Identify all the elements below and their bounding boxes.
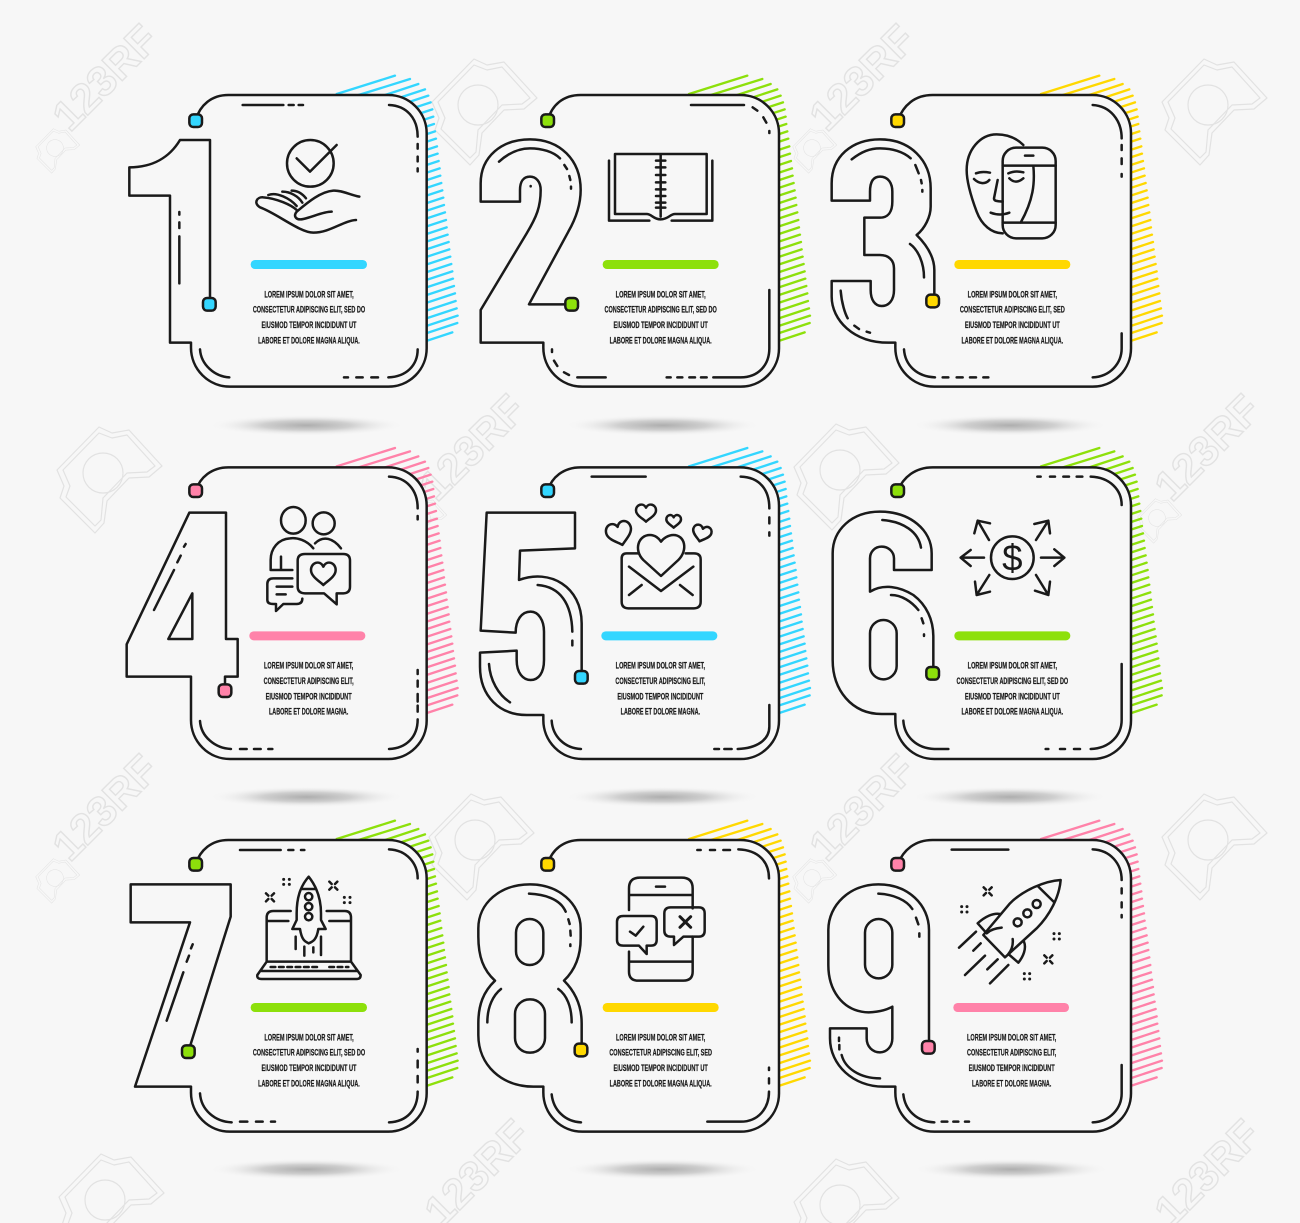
text block: LOREM IPSUM DOLOR SIT AMET, (264, 1032, 354, 1042)
icon: dollar with arrows: $ (1002, 538, 1023, 579)
stripes (1041, 821, 1162, 1088)
text block: LOREM IPSUM DOLOR SIT AMET, (968, 661, 1057, 671)
text block: EIUSMOD TEMPOR INCIDIDUNT (266, 691, 352, 701)
text block: EIUSMOD TEMPOR INCIDIDUNT (969, 1063, 1055, 1073)
stripes (337, 448, 458, 716)
text block: EIUSMOD TEMPOR INCIDIDUNT (617, 691, 704, 701)
numeral 6 counter (870, 620, 897, 679)
connector nodes (891, 114, 939, 307)
panel: step 7 (131, 821, 458, 1180)
numeral 9 and frame (828, 840, 1131, 1132)
icon: spiral book (609, 154, 712, 221)
text block (615, 661, 705, 717)
panel: step 6 (833, 448, 1162, 808)
text block: EIUSMOD TEMPOR INCIDIDUNT UT (965, 320, 1060, 330)
text block: LOREM IPSUM DOLOR SIT AMET, (264, 661, 353, 671)
text block: EIUSMOD TEMPOR INCIDIDUNT UT (261, 1063, 357, 1073)
text block: CONSECTETUR ADIPISCING ELIT, SED DO (604, 305, 717, 315)
text block: EIUSMOD TEMPOR INCIDIDUNT UT (613, 1063, 708, 1073)
shadow (564, 786, 761, 808)
stripes (689, 448, 810, 716)
text block (253, 1032, 365, 1088)
panel: step 1 (129, 76, 458, 436)
frame accents (167, 849, 418, 1122)
icon: face and phone (967, 134, 1056, 238)
panel fill (895, 467, 1131, 759)
text block (264, 661, 354, 717)
icon sparkle dots (960, 905, 1061, 980)
numeral 9 counter (865, 919, 892, 978)
connector nodes (189, 114, 216, 311)
text block (253, 289, 365, 345)
text block: CONSECTETUR ADIPISCING ELIT, SED DO (956, 676, 1068, 686)
text block: LABORE ET DOLORE MAGNA ALIQUA. (961, 335, 1063, 345)
frame accents (841, 105, 1122, 377)
panel fill (895, 840, 1131, 1132)
icon: phone with chat bubbles (617, 878, 705, 981)
watermarks: 123RF (43, 746, 167, 869)
connector nodes (541, 858, 587, 1056)
text block: LOREM IPSUM DOLOR SIT AMET, (616, 1032, 705, 1042)
icon: laptop rocket launch (257, 877, 361, 979)
connector nodes (182, 858, 202, 1058)
shadow (564, 415, 761, 436)
panel: step 9 (828, 821, 1162, 1180)
connector nodes (541, 114, 578, 311)
connector nodes (891, 858, 935, 1054)
frame accents (882, 477, 1122, 749)
colour bar (953, 1003, 1069, 1012)
watermarks: 123RF (1145, 386, 1269, 509)
shadow (912, 415, 1108, 436)
text block: EIUSMOD TEMPOR INCIDIDUNT UT (261, 320, 357, 330)
text block: EIUSMOD TEMPOR INCIDIDUNT UT (613, 320, 708, 330)
text block: LABORE ET DOLORE MAGNA ALIQUA. (610, 1078, 712, 1088)
panel: step 5 (480, 448, 810, 808)
text block: CONSECTETUR ADIPISCING ELIT, SED DO (253, 305, 365, 315)
text block: LOREM IPSUM DOLOR SIT AMET, (967, 1032, 1056, 1042)
panel: step 8 (478, 821, 810, 1180)
numeral 8 and frame (478, 840, 779, 1132)
panel: step 3 (832, 76, 1162, 436)
colour bar (603, 260, 719, 269)
text block: LABORE ET DOLORE MAGNA ALIQUA. (961, 707, 1063, 717)
watermarks: 123RF (43, 16, 167, 139)
connector nodes (541, 484, 588, 684)
text block: CONSECTETUR ADIPISCING ELIT, (967, 1048, 1056, 1058)
text block: LOREM IPSUM DOLOR SIT AMET, (616, 661, 705, 671)
stripes (689, 76, 810, 343)
frame accents (179, 105, 418, 377)
text block: CONSECTETUR ADIPISCING ELIT, SED (960, 305, 1065, 315)
icon: hand with check (256, 140, 359, 233)
numeral 3 and frame (832, 95, 1131, 387)
text block: LOREM IPSUM DOLOR SIT AMET, (616, 289, 706, 299)
text block: LOREM IPSUM DOLOR SIT AMET, (968, 289, 1057, 299)
connector nodes (891, 484, 939, 680)
colour bar (249, 631, 365, 640)
frame accents (839, 849, 1122, 1122)
icon sparkle dots (282, 878, 351, 904)
panel fill (895, 95, 1131, 387)
text block (960, 289, 1065, 345)
text block: LABORE ET DOLORE MAGNA. (972, 1078, 1051, 1088)
text block: LABORE ET DOLORE MAGNA ALIQUA. (258, 335, 360, 345)
watermarks: 123RF (410, 386, 534, 509)
numeral 2 and frame (481, 95, 779, 387)
text block: CONSECTETUR ADIPISCING ELIT, SED DO (253, 1048, 365, 1058)
shadow (208, 415, 405, 436)
frame accents (154, 477, 418, 749)
watermarks: 123RF (800, 16, 924, 139)
panel fill (543, 840, 779, 1132)
panel fill (191, 467, 427, 759)
stripes (1041, 76, 1162, 343)
shadow (912, 786, 1108, 808)
stripes (337, 821, 458, 1088)
numeral 1 and frame (129, 95, 427, 387)
colour bar (954, 260, 1070, 269)
watermarks: 123RF (800, 746, 924, 869)
shadow (208, 786, 405, 808)
stripes (337, 76, 458, 343)
text block: LOREM IPSUM DOLOR SIT AMET, (264, 289, 354, 299)
connector nodes (189, 484, 231, 697)
shadow (208, 1159, 405, 1180)
text block: CONSECTETUR ADIPISCING ELIT, SED (609, 1048, 712, 1058)
shadow (913, 1159, 1110, 1180)
panel: step 2 (481, 76, 810, 436)
frame accents (487, 849, 769, 1122)
panel fill (191, 840, 427, 1132)
panel: step 4 (127, 448, 458, 808)
text block: CONSECTETUR ADIPISCING ELIT, (264, 676, 354, 686)
colour bar (954, 631, 1070, 640)
icon: dollar with arrows (961, 521, 1064, 595)
text block: LABORE ET DOLORE MAGNA ALIQUA. (610, 335, 712, 345)
panel fill (543, 467, 779, 759)
colour bar (251, 1003, 367, 1012)
text block (604, 289, 717, 345)
text block: LABORE ET DOLORE MAGNA ALIQUA. (258, 1078, 360, 1088)
text block (967, 1032, 1056, 1088)
text block: LABORE ET DOLORE MAGNA. (269, 707, 348, 717)
text block: CONSECTETUR ADIPISCING ELIT, (615, 676, 705, 686)
panel fill (543, 95, 779, 387)
numeral 5 and frame (480, 467, 779, 759)
numeral 4 and frame (127, 467, 427, 759)
text block (609, 1032, 712, 1088)
text block (956, 661, 1068, 717)
colour bar (603, 1003, 719, 1012)
text block: EIUSMOD TEMPOR INCIDIDUNT UT (965, 691, 1060, 701)
numeral 8 counters (515, 919, 545, 1053)
icon: flying rocket (959, 880, 1061, 983)
colour bar (601, 631, 717, 640)
frame accents (489, 477, 769, 749)
stripes (689, 821, 810, 1088)
shadow (564, 1159, 761, 1180)
icon: couple and love chat (267, 507, 350, 611)
frame accents (499, 105, 769, 377)
colour bar (251, 260, 367, 269)
panel fill (191, 95, 427, 387)
numeral 7 and frame (131, 840, 427, 1132)
icon: love mail (604, 505, 713, 608)
text block: LABORE ET DOLORE MAGNA. (621, 707, 700, 717)
stripes (1041, 448, 1162, 716)
numeral 6 and frame (833, 467, 1131, 759)
